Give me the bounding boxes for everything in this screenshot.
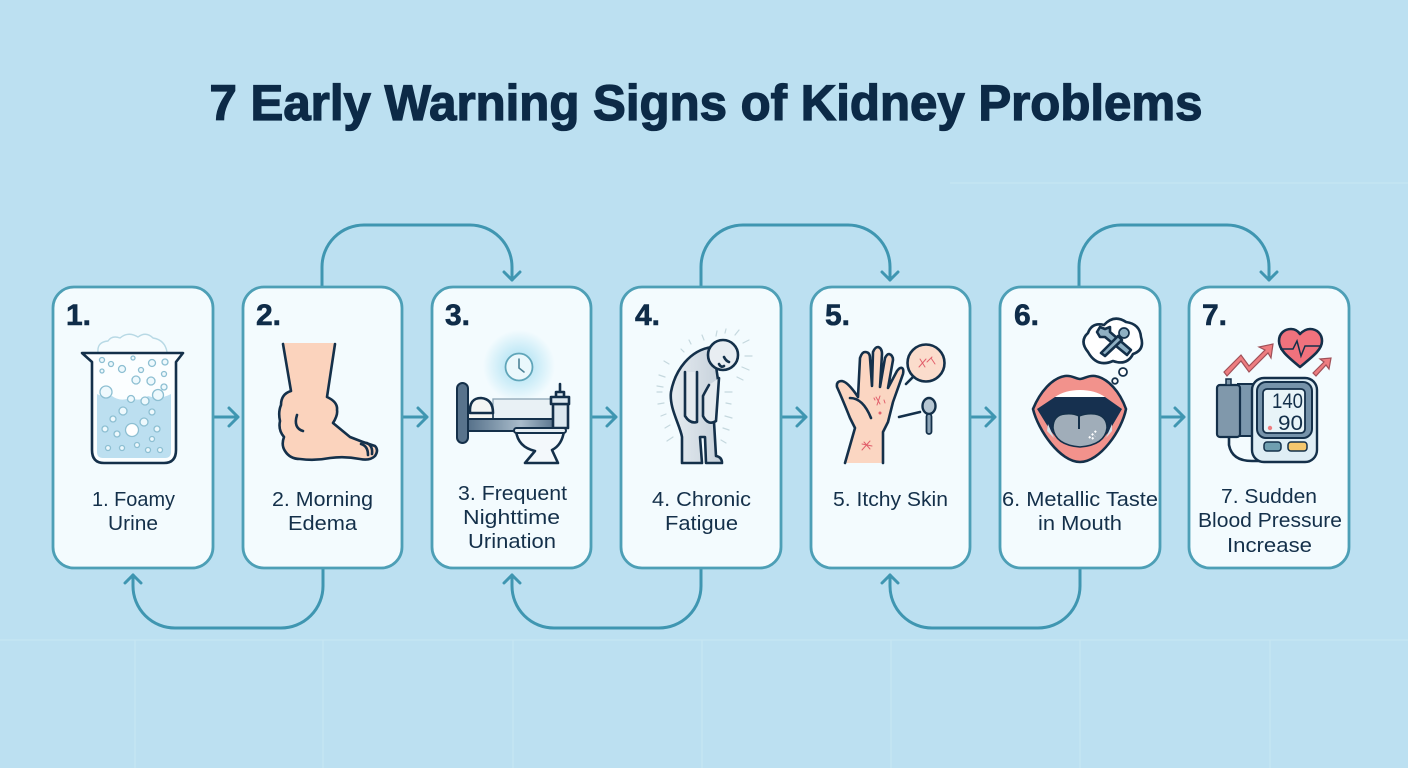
connector: card 4 to card 5 over the top — [701, 225, 898, 286]
number 1: 1. — [66, 299, 91, 332]
icon: bed, toilet and clock — [457, 330, 569, 463]
number 2: 2. — [256, 299, 281, 332]
label: 4. Chronic — [652, 488, 751, 511]
panel: metallic taste in mouth — [1000, 287, 1160, 568]
label: Urine — [108, 512, 158, 535]
icon: tired figure — [657, 329, 752, 463]
number 3: 3. — [445, 299, 470, 332]
icon: foamy beaker — [82, 334, 183, 463]
number 6: 6. — [1014, 299, 1039, 332]
arrow: card 4 to card 5 — [782, 408, 806, 426]
label: Fatigue — [665, 512, 738, 535]
panel: itchy skin — [811, 287, 970, 568]
label: Urination — [468, 530, 556, 553]
label: Nighttime — [463, 506, 560, 529]
panel: sudden blood pressure increase — [1189, 287, 1349, 568]
connector: card 6 to card 7 over the top — [1079, 225, 1277, 286]
arrow: card 1 to card 2 — [214, 408, 238, 426]
arrow: card 2 to card 3 — [403, 408, 427, 426]
label: in Mouth — [1038, 512, 1122, 535]
panel: foamy urine — [53, 287, 213, 568]
label — [272, 488, 373, 535]
label: 3. Frequent — [458, 482, 567, 505]
panel: frequent nighttime urination — [432, 287, 591, 568]
icon: blood pressure monitor, heart and arrows: 140 — [1272, 390, 1303, 413]
icon: blood pressure monitor, heart and arrows: 90 — [1278, 412, 1303, 435]
arrow: card 3 to card 4 — [592, 408, 616, 426]
label — [652, 488, 751, 535]
panel: morning edema — [243, 287, 402, 568]
arrow: card 6 to card 7 — [1160, 408, 1184, 426]
label: 7. Sudden — [1221, 485, 1317, 508]
connector: card 6 to card 5 under the bottom — [882, 569, 1080, 628]
icon: swollen foot — [279, 343, 377, 460]
number 7: 7. — [1202, 299, 1227, 332]
label: 2. Morning — [272, 488, 373, 511]
connector: card 4 to card 3 under the bottom — [504, 569, 701, 628]
panel: chronic fatigue — [621, 287, 781, 568]
label: 5. Itchy Skin — [833, 488, 948, 511]
label: 6. Metallic Taste — [1002, 488, 1158, 511]
number 4: 4. — [635, 299, 660, 332]
label: Increase — [1227, 534, 1312, 557]
label — [1002, 488, 1158, 535]
title: 7 Early Warning Signs of Kidney Problems — [210, 75, 1202, 131]
label — [458, 482, 567, 553]
icon: hand with rash and spoon — [837, 344, 944, 463]
label: Edema — [288, 512, 358, 535]
label: 1. Foamy — [92, 488, 176, 511]
label — [1198, 485, 1342, 557]
connector: card 2 to card 3 over the top — [322, 225, 520, 286]
icon: blood pressure monitor, heart and arrows — [1217, 329, 1331, 462]
label: Blood Pressure — [1198, 509, 1342, 532]
connector: card 2 to card 1 under the bottom — [125, 569, 323, 628]
number 5: 5. — [825, 299, 850, 332]
icon: open mouth with thought bubble — [1033, 319, 1142, 462]
label — [92, 488, 176, 535]
arrow: card 5 to card 6 — [971, 408, 995, 426]
